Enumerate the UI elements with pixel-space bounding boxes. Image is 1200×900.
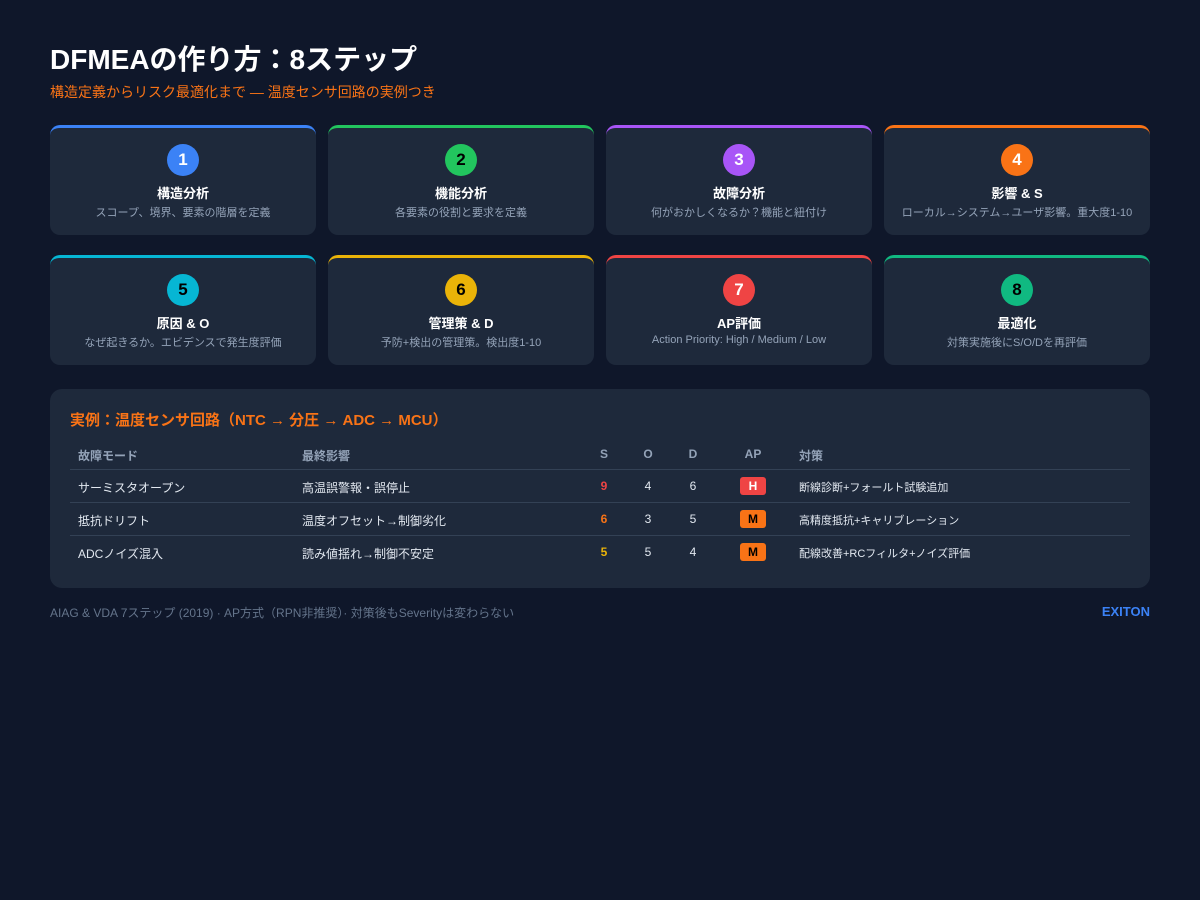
row 2: 温度オフセット→制御劣化 xyxy=(302,514,446,528)
row 1: H xyxy=(749,479,757,493)
row 3: ADCノイズ混入 xyxy=(78,547,163,561)
card: step 6 xyxy=(328,255,594,365)
card: step 1: 構造分析 xyxy=(157,186,209,201)
card: step 8 xyxy=(884,255,1150,365)
row 2: 5 xyxy=(690,512,696,526)
table header: 最終影響 xyxy=(302,449,350,463)
card: step 1 xyxy=(50,125,316,235)
card: step 7: 7 xyxy=(734,280,744,299)
card: step 8: 対策実施後にS/O/Dを再評価 xyxy=(947,337,1087,349)
row 3: 5 xyxy=(601,545,607,559)
card: step 2: 2 xyxy=(456,150,466,169)
card: step 4: 影響 & S xyxy=(991,186,1043,201)
card: step 6: 予防+検出の管理策。検出度1-10 xyxy=(381,337,541,349)
card: step 8: 8 xyxy=(1012,280,1022,299)
row 2: 抵抗ドリフト xyxy=(78,514,150,528)
card: step 6: 6 xyxy=(456,280,466,299)
footer note: AIAG & VDA 7ステップ (2019) · AP方式（RPN非推奨）· 対策後もSeverityは変わらない xyxy=(50,606,514,620)
card: step 5: なぜ起きるか。エビデンスで発生度評価 xyxy=(84,337,282,349)
row 3: 5 xyxy=(645,545,651,559)
card: step 7: Action Priority: High / Medium / Low xyxy=(652,334,826,346)
row 3: 配線改善+RCフィルタ+ノイズ評価 xyxy=(799,548,970,560)
row 1: 高温誤警報・誤停止 xyxy=(302,481,410,495)
card: step 1: 1 xyxy=(178,150,188,169)
row 1: サーミスタオープン xyxy=(78,481,185,495)
row 2: 6 xyxy=(601,512,607,526)
card: step 5 xyxy=(50,255,316,365)
card: step 2 xyxy=(328,125,594,235)
table header: 対策 xyxy=(799,449,823,463)
row 1: 断線診断+フォールト試験追加 xyxy=(799,482,948,494)
card: step 4: 4 xyxy=(1012,150,1022,169)
card: step 7: AP評価 xyxy=(717,316,761,331)
card: step 3: 故障分析 xyxy=(713,186,765,201)
subtitle: 構造定義からリスク最適化まで — 温度センサ回路の実例つき xyxy=(50,84,436,100)
table header xyxy=(70,437,1130,470)
row 1: 6 xyxy=(690,479,696,493)
card: step 2: 機能分析 xyxy=(435,186,487,201)
card: step 3: 3 xyxy=(734,150,744,169)
title: DFMEAの作り方：8ステップ xyxy=(50,44,417,75)
card: step 7 xyxy=(606,255,872,365)
brand: EXITON xyxy=(1102,604,1150,619)
row 2: 3 xyxy=(645,512,651,526)
panel title: 実例：温度センサ回路（NTC → 分圧 → ADC → MCU） xyxy=(70,412,448,429)
card: step 8: 最適化 xyxy=(997,316,1036,331)
table header: S xyxy=(600,447,608,461)
table header: AP xyxy=(745,447,761,461)
table header: 故障モード xyxy=(78,449,138,463)
card: step 3: 何がおかしくなるか？機能と紐付け xyxy=(651,207,827,219)
row 3 xyxy=(78,543,970,561)
table header: O xyxy=(643,447,653,461)
row 3: 読み値揺れ→制御不安定 xyxy=(302,547,434,561)
table header: D xyxy=(689,447,697,461)
row 2: M xyxy=(748,512,758,526)
card: step 4: ローカル→システム→ユーザ影響。重大度1-10 xyxy=(902,207,1132,219)
row 3: M xyxy=(748,545,758,559)
card: step 6: 管理策 & D xyxy=(428,316,494,331)
row 3: 4 xyxy=(690,545,696,559)
row 2: 高精度抵抗+キャリブレーション xyxy=(799,515,959,527)
row 1: 9 xyxy=(601,479,607,493)
card: step 5: 原因 & O xyxy=(157,316,209,331)
card: step 5: 5 xyxy=(178,280,188,299)
card: step 1: スコープ、境界、要素の階層を定義 xyxy=(95,207,270,219)
panel: example table xyxy=(50,389,1150,588)
row 2 xyxy=(70,503,1130,536)
card: step 2: 各要素の役割と要求を定義 xyxy=(395,207,527,219)
card: step 4 xyxy=(884,125,1150,235)
card: step 3 xyxy=(606,125,872,235)
row 1 xyxy=(70,470,1130,503)
row 1: 4 xyxy=(645,479,651,493)
